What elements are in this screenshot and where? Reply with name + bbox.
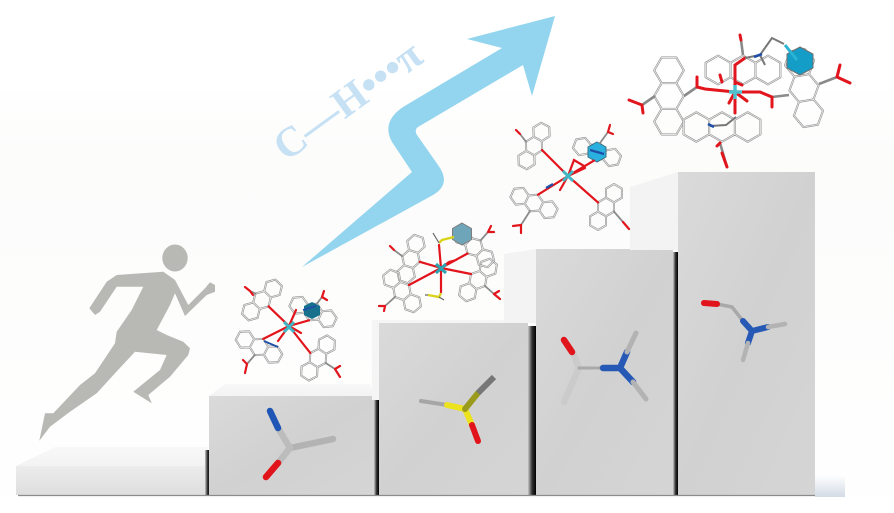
upward arrow (302, 16, 555, 267)
highlighted aromatic ring (787, 47, 813, 75)
label: C-H...pi: C—H•••π (265, 32, 431, 170)
running figure silhouette (39, 244, 215, 441)
metal centre (563, 171, 573, 181)
staircase (16, 172, 815, 496)
step 2 (372, 320, 536, 495)
solvent model 3 (564, 333, 646, 402)
ring frameworks (234, 276, 339, 383)
step 1 (209, 384, 379, 495)
carboxyl stems (385, 232, 494, 306)
solvent model 1 (266, 411, 333, 477)
carboxyl stems (520, 132, 623, 225)
ring frameworks (508, 121, 626, 232)
ligand (710, 38, 784, 126)
highlighted aromatic ring (304, 302, 320, 319)
metal centre (284, 322, 294, 332)
ligand (546, 150, 604, 188)
highlighted aromatic ring (452, 223, 472, 245)
crystal structure 4 (629, 35, 850, 167)
solvent model 4 (704, 303, 785, 360)
ligand (264, 306, 316, 347)
metal centre (436, 264, 446, 273)
crystal structure 1 (234, 276, 340, 383)
step 0 (16, 447, 210, 495)
crystal structure 2 (379, 223, 500, 315)
sulfoxide ligands (428, 237, 454, 297)
metal centre (729, 85, 742, 99)
coordination bonds (243, 287, 340, 377)
crystal structure 3 (508, 121, 629, 233)
step 4 (630, 172, 815, 495)
step 3 (504, 249, 678, 495)
coordination bonds (513, 125, 629, 233)
floor line (18, 494, 815, 496)
carboxyl stems (642, 40, 837, 167)
ring frameworks (654, 48, 825, 142)
solvent model 2 (421, 377, 494, 441)
highlighted aromatic ring (588, 142, 606, 162)
ring frameworks (380, 224, 500, 315)
coordination bonds (629, 35, 850, 167)
carboxyl stems (247, 291, 335, 369)
floor shadow (815, 475, 845, 497)
coordination bonds (379, 226, 500, 311)
